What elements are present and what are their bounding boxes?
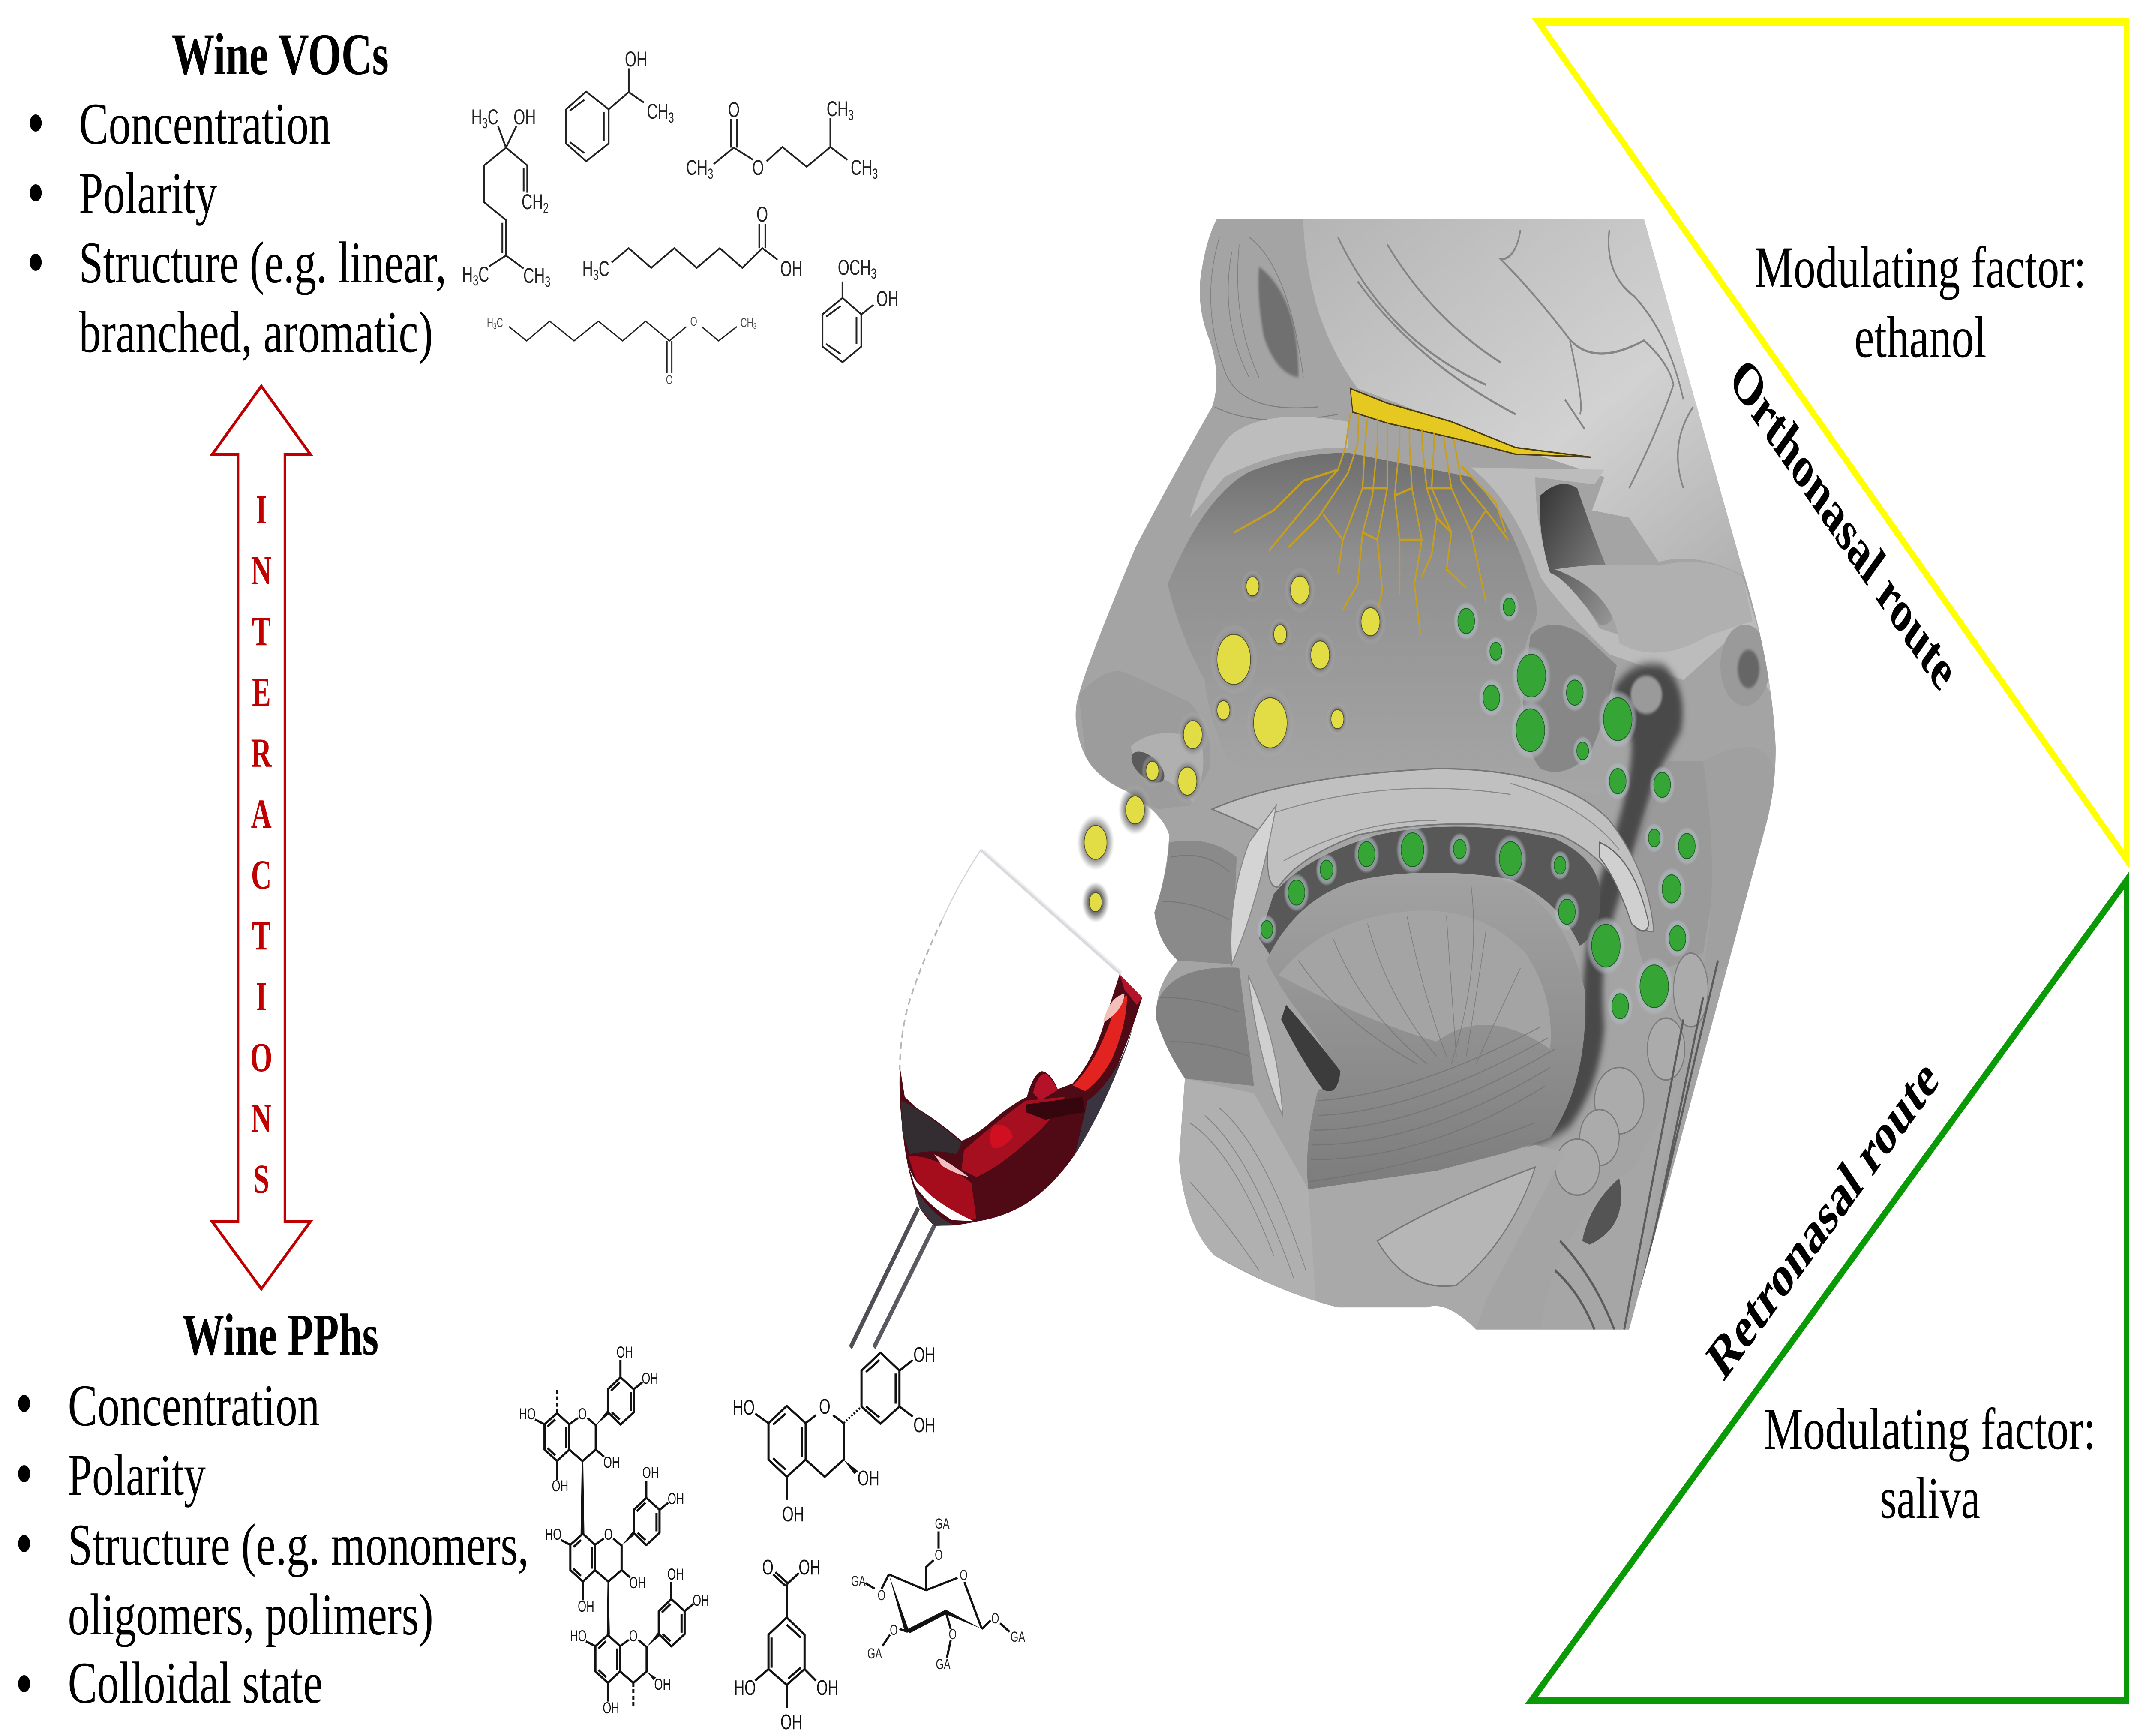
atom labels of procyanidin trimer: OH [668,1490,684,1508]
ear tube [1720,625,1770,706]
atom labels of VOC molecules: 3 [848,108,854,123]
label: INTERACTIONS: C [251,852,272,898]
label: INTERACTIONS: S [253,1156,269,1202]
floor of mouth [1308,1145,1565,1330]
brain sulci [1338,230,1693,488]
atom labels of procyanidin trimer: OH [654,1675,671,1693]
olfactory bulb [1350,388,1591,457]
atom labels of procyanidin trimer: HO [519,1405,536,1423]
sphenoid region [1555,562,1753,652]
atom labels of VOC molecules: 3 [545,274,550,290]
atom labels of procyanidin trimer: OH [642,1369,658,1387]
label: INTERACTIONS: T [252,608,271,654]
text: modulating factor saliva: Modulating factor: [1764,1396,2096,1462]
label: INTERACTIONS: E [252,669,271,715]
atom labels of VOC molecules: 2 [543,201,549,216]
mouth gap [1281,1005,1340,1091]
text: modulating factor ethanol [1754,234,2086,370]
atom labels of VOC molecules: O [690,315,697,329]
label: Retronasal route: Retronasal route [1698,1045,1947,1392]
text: modulating factor ethanol: Modulating factor: [1754,234,2086,300]
atom labels of procyanidin trimer: O [629,1627,638,1645]
atom labels of VOC molecules: C [488,105,498,129]
bullet list: VOC properties: Polarity [79,160,217,226]
atom labels of procyanidin trimer: OH [667,1565,684,1583]
atom labels of pentagalloyl glucose: O [949,1627,957,1643]
label: INTERACTIONS: I [256,973,267,1019]
choana [1523,625,1617,772]
bullet list: PPh properties [18,1373,529,1715]
wine highlights [901,974,1142,1226]
chemical structures: VOC molecules [462,48,899,387]
atom labels of VOC molecules: OH [625,48,647,72]
bullet list: PPh properties: Colloidal state [68,1650,323,1715]
text: modulating factor ethanol: ethanol [1854,304,1987,370]
atom labels of pentagalloyl glucose: O [890,1622,898,1638]
yellow aroma molecules (orthonasal) [1077,567,1386,923]
atom labels of gallic acid: OH [798,1556,820,1579]
atom labels of VOC molecules: 3 [708,166,713,182]
label: INTERACTIONS: I [256,487,267,532]
atom labels of procyanidin trimer: HO [545,1525,561,1543]
soft palate uvula [1600,842,1649,931]
atom labels of VOC molecules: OCH [838,256,871,280]
teeth [1231,805,1276,964]
atom labels of VOC molecules: CH [827,97,848,121]
panel: wine VOCs [30,21,447,365]
head cross-section illustration [1076,219,1782,1330]
maxillary nose side [1079,671,1210,809]
atom labels of pentagalloyl glucose: O [991,1611,999,1627]
label: Orthonasal route: Orthonasal route [1721,345,1966,703]
bonds of VOC molecules [484,68,873,373]
label: INTERACTIONS: T [252,913,271,958]
atom labels of VOC molecules: 3 [668,110,674,126]
atom labels of VOC molecules: O [752,156,764,180]
oral cavity [1259,826,1600,961]
tongue [1267,873,1585,1189]
atom labels of pentagalloyl glucose: GA [867,1646,882,1662]
lips [1154,841,1237,964]
atom labels of gallic acid: OH [816,1676,838,1699]
atom labels of VOC molecules: O [666,373,673,387]
atom labels of procyanidin trimer: OH [629,1574,646,1592]
atom labels of catechin: O [819,1395,831,1418]
hard palate [1212,769,1654,931]
atom labels of procyanidin trimer: OH [578,1597,594,1615]
atom labels of VOC molecules: OH [513,105,536,129]
atom labels of VOC molecules: 3 [493,321,497,331]
atom labels of VOC molecules: CH [741,316,753,330]
atom labels of procyanidin trimer: OH [642,1463,659,1481]
atom labels of pentagalloyl glucose: O [878,1588,885,1604]
atom labels of pentagalloyl glucose: GA [936,1657,951,1673]
atom labels of VOC molecules: O [756,203,768,227]
bullet list: VOC properties: Structure (e.g. linear, [79,230,447,295]
atom labels of procyanidin trimer [519,1343,709,1717]
atom labels of pentagalloyl glucose: GA [935,1516,950,1532]
tongue fibres [1298,887,1555,1182]
atom labels of catechin: OH [782,1502,804,1526]
atom labels of pentagalloyl glucose: O [960,1568,968,1583]
olfactory nerves [1234,414,1508,634]
atom labels of catechin: OH [858,1466,879,1490]
atom labels of catechin: OH [913,1413,935,1436]
atom labels of procyanidin trimer: OH [616,1343,633,1361]
frontal bone [1190,417,1348,518]
panel: retronasal route triangle [1531,880,2127,1700]
atom labels of pentagalloyl glucose: GA [851,1574,866,1589]
label: INTERACTIONS: R [251,730,272,776]
atom labels of VOC molecules: H [582,257,593,281]
atom labels of VOC molecules: C [478,263,489,287]
glass stem [850,1208,936,1348]
atom labels of VOC molecules: H [471,105,482,129]
atom labels of VOC molecules: 3 [593,267,599,283]
chemical structures: polyphenols [519,1343,1025,1733]
text: modulating factor saliva: saliva [1880,1465,1980,1531]
atom labels of VOC molecules: OH [876,287,899,311]
atom labels of VOC molecules: C [497,316,503,330]
forehead fold [1258,267,1298,377]
text: modulating factor saliva [1764,1396,2096,1531]
label: INTERACTIONS [250,487,273,1202]
atom labels of VOC molecules: 3 [753,321,756,331]
pharyngeal wall and glands [1633,761,1714,975]
label: INTERACTIONS: O [250,1034,273,1080]
atom labels of pentagalloyl glucose: O [935,1547,942,1563]
atom labels of catechin: HO [733,1396,755,1419]
atom labels of gallic acid: HO [734,1676,756,1699]
head outline base [1076,219,1776,1330]
bonds of polyphenol molecules [535,1352,1010,1708]
atom labels of procyanidin trimer: O [578,1405,587,1423]
atom labels of gallic acid: O [762,1556,774,1579]
neck muscles [1540,1086,1678,1330]
atom labels of VOC molecules: CH [522,190,543,214]
brain [1303,219,1745,577]
atom labels of VOC molecules: H [487,316,493,330]
atom labels of VOC molecules: CH [523,264,545,288]
atom labels of VOC molecules: 3 [872,166,878,182]
glass bowl outline [900,850,1122,1070]
panel: orthonasal route triangle [1539,22,2127,859]
atom labels of procyanidin trimer: OH [603,1699,619,1717]
atom labels of VOC molecules: CH [647,100,668,124]
chin [1179,1078,1318,1307]
atom labels of pentagalloyl glucose: GA [1011,1629,1025,1645]
atom labels of VOC molecules: H [462,263,473,287]
atom labels of VOC molecules: O [728,98,740,122]
anatomy details clipped to the head [1079,219,1782,1330]
nasal cavity [1168,453,1537,689]
atom labels of VOC molecules: CH [686,156,708,180]
label: INTERACTIONS: N [251,1095,272,1141]
nasopharynx dark channel [1525,664,1683,1145]
atom labels of VOC molecules: 3 [482,116,488,132]
heading: Wine PPhs: Wine PPhs [182,1302,378,1367]
atom labels of VOC molecules: 3 [871,266,876,282]
atom labels of VOC molecules [462,48,899,387]
bullet list: PPh properties: Polarity [68,1442,206,1508]
sphenoid sinus [1540,484,1617,625]
bullet list: VOC properties: branched, aromatic) [79,299,433,365]
label: INTERACTIONS: A [251,791,272,837]
green aroma molecules (retronasal) [1257,592,1700,1025]
atom labels of VOC molecules: C [599,257,609,281]
bullet list: VOC properties: Concentration [79,91,331,156]
atom labels of gallic acid: OH [780,1710,802,1733]
atom labels of VOC molecules: OH [780,257,803,281]
atom labels of procyanidin trimer: OH [552,1477,568,1495]
bullet list: VOC properties [30,91,447,365]
atom labels of catechin [733,1343,935,1526]
atom labels of procyanidin trimer: O [604,1525,612,1543]
bullet list: PPh properties: Concentration [68,1373,320,1438]
atom labels of VOC molecules: CH [851,156,872,180]
arrow: interactions double arrow [212,386,310,1289]
cribriform bone right [1471,467,1771,693]
glands [1555,953,1708,1195]
atom labels of catechin: OH [913,1343,935,1366]
heading: Wine VOCs: Wine VOCs [172,21,389,87]
bullet list: PPh properties: oligomers, polimers) [68,1582,433,1647]
label: INTERACTIONS: N [251,547,272,593]
atom labels of VOC molecules: 3 [473,273,478,289]
atom labels of procyanidin trimer: OH [693,1591,709,1609]
bullet list: PPh properties: Structure (e.g. monomers, [68,1512,529,1577]
atom labels of gallic acid [734,1556,838,1733]
atom labels of procyanidin trimer: HO [570,1627,587,1645]
wine body [900,974,1142,1226]
atom labels of procyanidin trimer: OH [603,1453,620,1471]
atom labels of pentagalloyl glucose [851,1516,1025,1673]
wine glass [850,850,1142,1348]
panel: wine PPhs [18,1302,529,1715]
